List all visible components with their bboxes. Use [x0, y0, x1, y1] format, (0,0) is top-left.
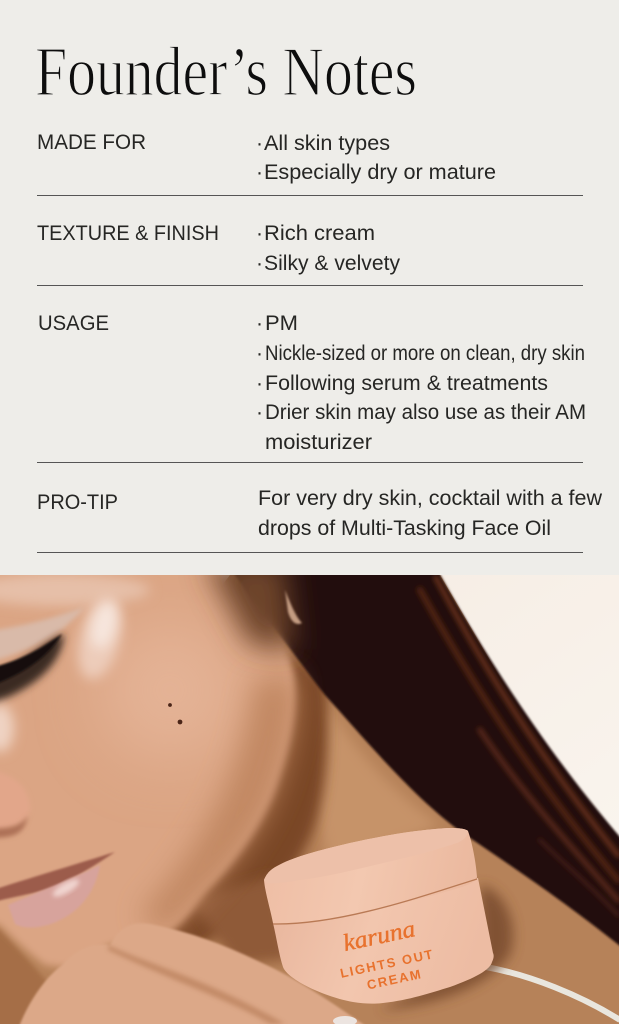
list: made for [256, 132, 496, 184]
list: texture and finish: Rich cream [264, 222, 375, 245]
row: made for [37, 131, 496, 184]
text: pro-tip [258, 487, 603, 540]
jar base [273, 878, 494, 1004]
jar: Lights Out Cream [264, 828, 494, 1004]
list: usage: Drier skin may also use as their AM [265, 401, 586, 424]
label: made for: MADE FOR [37, 131, 146, 154]
ear piece [285, 590, 302, 624]
list: made for: · [256, 132, 263, 155]
seam [273, 879, 477, 924]
list: usage: moisturizer [265, 431, 372, 454]
list: texture and finish: · [256, 252, 263, 275]
cord [486, 967, 619, 1020]
list: usage: · [256, 372, 263, 395]
panel: notes background [0, 0, 619, 575]
list: made for: Especially dry or mature [264, 161, 496, 184]
cheek highlight [72, 596, 128, 683]
label: pro-tip: PRO-TIP [37, 491, 118, 514]
list: usage: · [256, 312, 263, 335]
product name: CREAM [366, 966, 424, 992]
hair [225, 560, 619, 962]
shadow under chin [0, 930, 46, 1024]
hand and fingers [20, 923, 380, 1024]
list: made for: All skin types [264, 132, 390, 155]
text: pro-tip: For very dry skin, cocktail with a few [258, 487, 603, 510]
shadow behind jaw [165, 650, 328, 950]
list: usage: PM [265, 312, 298, 335]
list: texture and finish: Silky & velvety [264, 252, 400, 275]
product name: LIGHTS OUT [339, 946, 435, 981]
brand: karuna [341, 916, 418, 957]
list: usage: Nickle-sized or more on clean, dry skin [265, 342, 585, 365]
title: Founder’s Notes [35, 34, 417, 111]
label: usage: USAGE [38, 312, 109, 335]
list: usage: · [256, 401, 263, 424]
moles [168, 703, 172, 707]
list: texture and finish: · [256, 222, 263, 245]
nose [0, 768, 30, 834]
studio background [442, 575, 619, 834]
lips [0, 852, 115, 927]
lid top [264, 828, 468, 883]
text: pro-tip: drops of Multi-Tasking Face Oil [258, 517, 551, 540]
hair highlights [420, 578, 618, 915]
list: usage: · [256, 342, 263, 365]
cheek shading [104, 624, 236, 756]
jar shadow [380, 885, 513, 1010]
list: usage [256, 312, 586, 454]
jar lid [264, 828, 477, 924]
product name [340, 950, 432, 989]
row: usage [38, 312, 586, 454]
list: usage: Following serum & treatments [265, 372, 548, 395]
list: texture and finish [256, 222, 400, 275]
eye [0, 607, 85, 708]
row: texture and finish [37, 222, 400, 275]
photo: woman holding cream jar [0, 545, 619, 1024]
list: made for: · [256, 161, 263, 184]
label: texture and finish: TEXTURE & FINISH [37, 222, 219, 245]
shoulder and neck [0, 575, 619, 1024]
row: pro-tip [37, 487, 603, 540]
face [0, 545, 295, 968]
